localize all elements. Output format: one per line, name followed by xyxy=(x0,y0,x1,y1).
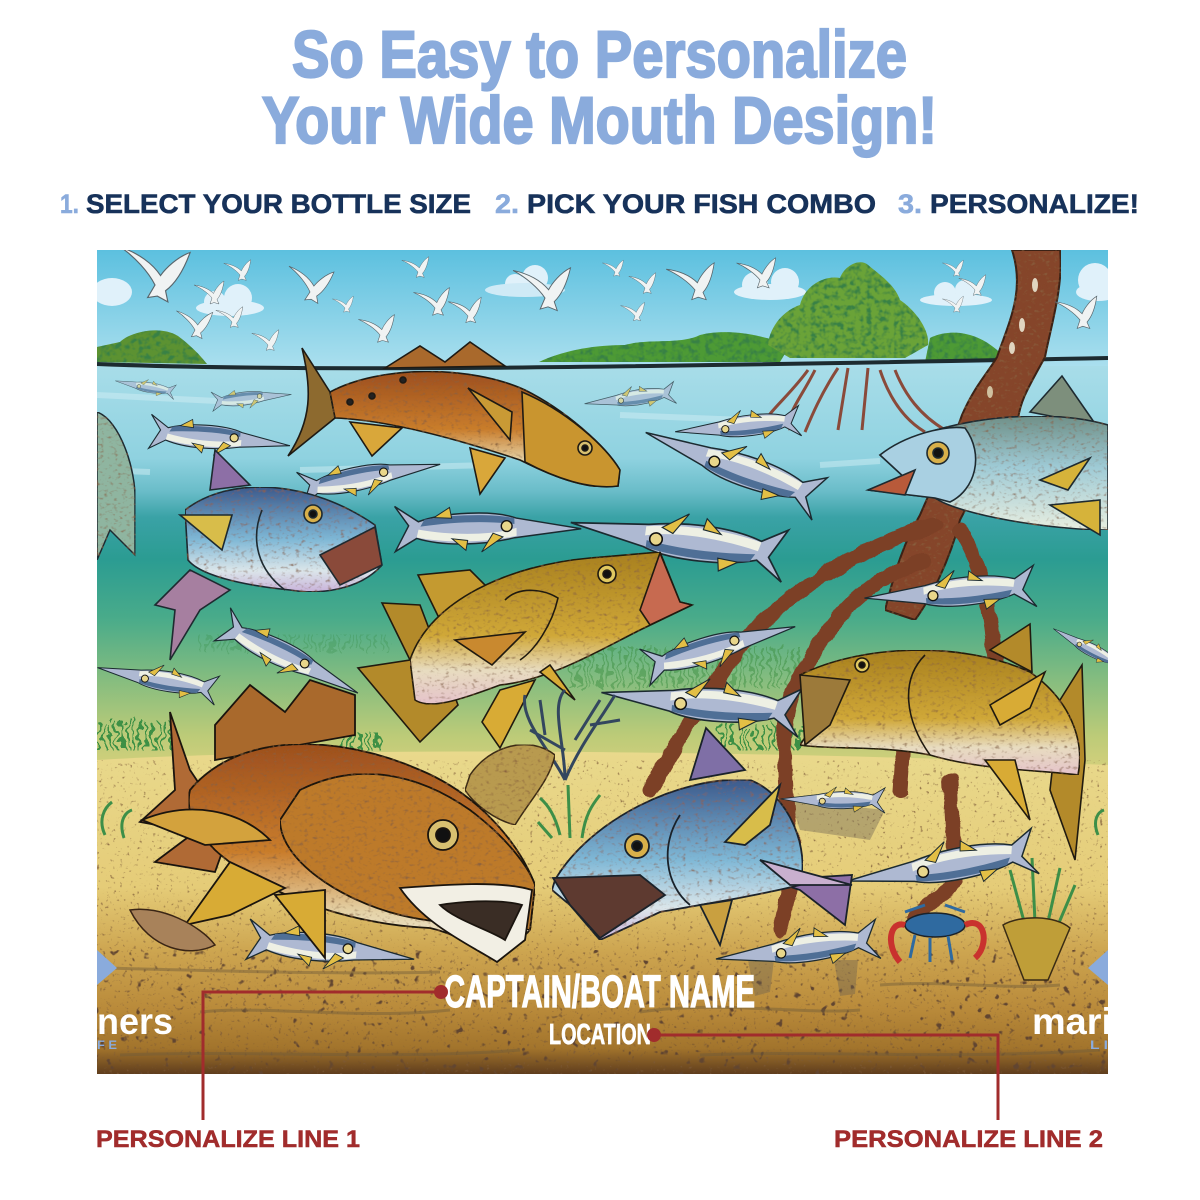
sky xyxy=(97,250,1108,366)
logo right clipped xyxy=(1032,950,1112,1052)
blue crab xyxy=(891,905,984,962)
logo left clipped: F E xyxy=(97,1038,117,1052)
mangrove trunk xyxy=(885,250,1061,620)
steps line xyxy=(60,189,1139,219)
clouds xyxy=(92,263,1120,316)
title: So Easy to Personalize xyxy=(292,17,907,91)
sand speckles xyxy=(97,760,1108,1074)
seafan coral xyxy=(524,690,620,780)
fish: right snook xyxy=(800,624,1085,860)
fish: far left trout xyxy=(97,412,135,560)
logo left clipped xyxy=(97,950,173,1052)
fish: big trout xyxy=(552,728,852,945)
logo left clipped: ners xyxy=(97,1001,173,1042)
mangrove tree xyxy=(768,262,928,358)
mangrove prop roots xyxy=(650,525,995,930)
mangrove reflected roots xyxy=(760,368,945,432)
steps line: SELECT YOUR BOTTLE SIZE xyxy=(86,189,471,219)
root shadows xyxy=(748,800,885,996)
personalized location text: LOCATION xyxy=(549,1019,651,1051)
steps line: 2. xyxy=(495,189,519,219)
water brush bands xyxy=(97,395,880,472)
title: Your Wide Mouth Design! xyxy=(262,83,937,157)
title xyxy=(262,17,937,157)
fish: top redfish xyxy=(288,342,620,494)
fish: big redfish xyxy=(140,680,535,962)
water xyxy=(97,366,1108,786)
back needlefish school xyxy=(115,379,677,412)
fish: center snook xyxy=(358,552,692,748)
steps line: 3. xyxy=(898,189,922,219)
callout: line 1 connector xyxy=(203,985,448,1120)
sand plants xyxy=(102,785,1104,925)
needlefish group xyxy=(95,404,1125,981)
panel: illustration xyxy=(92,238,1125,1074)
sand ripples xyxy=(100,968,1100,1055)
steps line: PICK YOUR FISH COMBO xyxy=(527,189,876,219)
fish: upper right trout xyxy=(868,376,1108,535)
steps line: 1. xyxy=(60,189,79,219)
waterline xyxy=(97,358,1108,368)
personalized name text: CAPTAIN/BOAT NAME xyxy=(444,966,755,1017)
sand and mud floor xyxy=(97,752,1108,1074)
logo right clipped: L I xyxy=(1090,1038,1108,1052)
vase sponge xyxy=(1003,918,1070,980)
sponge xyxy=(465,745,555,825)
mud speckles xyxy=(97,950,1108,1074)
label: personalize line 1: PERSONALIZE LINE 1 xyxy=(96,1126,360,1153)
conch shell xyxy=(130,909,215,951)
label: personalize line 2: PERSONALIZE LINE 2 xyxy=(834,1126,1103,1153)
logo right clipped: mari xyxy=(1032,1001,1112,1042)
seagrass xyxy=(97,640,800,745)
callout: line 2 connector xyxy=(647,1028,998,1120)
left island xyxy=(97,330,207,364)
birds xyxy=(124,250,1098,351)
fish: left trout xyxy=(155,450,382,660)
long island xyxy=(539,332,1005,362)
steps line: PERSONALIZE! xyxy=(930,189,1139,219)
